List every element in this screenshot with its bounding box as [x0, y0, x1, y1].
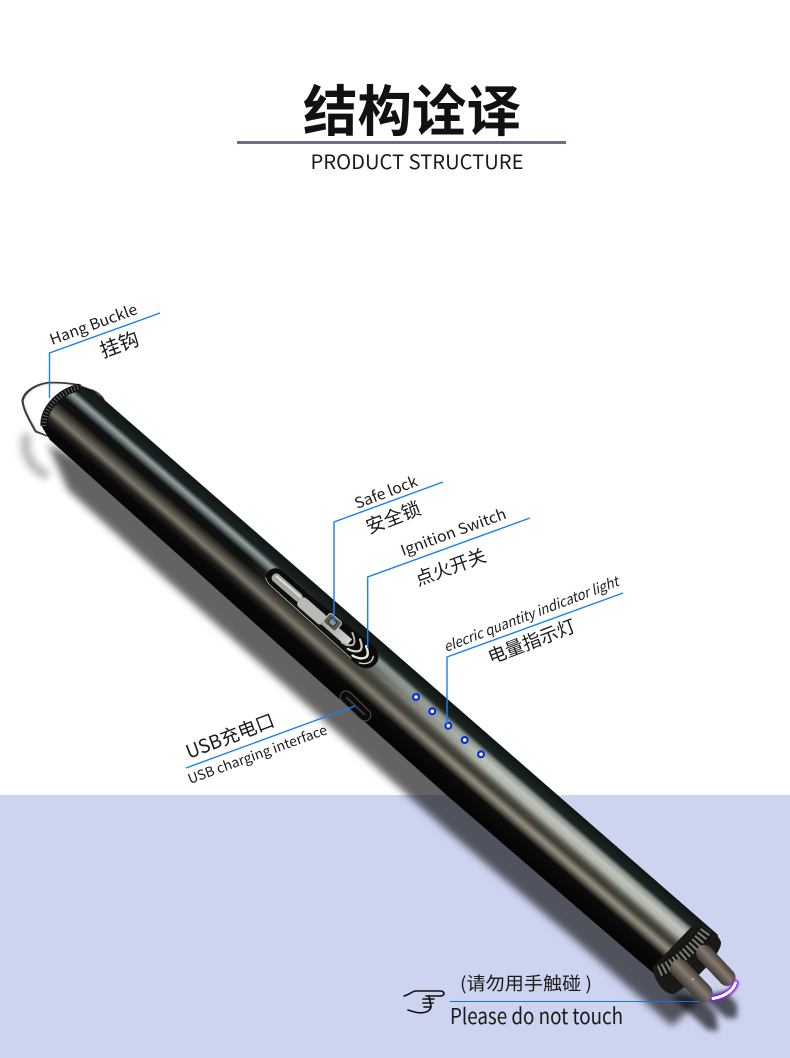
- callout: USB charging: [181, 706, 355, 788]
- electrode-side cap: [652, 922, 721, 994]
- callout: indicator light: 电量指示灯: [484, 612, 579, 670]
- callout: safe lock: 安全锁: [361, 494, 424, 540]
- electric arc: [713, 983, 736, 998]
- title: 结构诠译: [303, 67, 521, 147]
- title: [237, 67, 566, 175]
- cap face: [652, 922, 721, 994]
- slider neck: [321, 617, 352, 646]
- knurled band: [659, 929, 707, 971]
- ridged ignition tip: [339, 632, 377, 668]
- callout: indicator light: [441, 571, 623, 725]
- lighter barrel: [42, 386, 718, 988]
- callout: hang buckle: [47, 298, 160, 398]
- electrode pins: [666, 941, 739, 1006]
- callout: hang buckle: 挂钩: [95, 323, 143, 364]
- front pin: [666, 955, 717, 1006]
- slider knob: [295, 595, 329, 627]
- ignition slider assembly: [260, 562, 384, 674]
- callout: ignition switch: Ignition Switch: [398, 503, 509, 561]
- indicator lights: [412, 693, 485, 758]
- USB-C port: [338, 688, 373, 724]
- slider housing: [260, 562, 384, 674]
- callout: please do not touch: Please do not touch: [450, 999, 623, 1031]
- product: electric arc lighter: [23, 383, 739, 1031]
- lighter shadow: [48, 444, 700, 1026]
- callout: ignition switch: [368, 503, 530, 648]
- housing rim: [262, 577, 355, 659]
- title: PRODUCT STRUCTURE: [310, 146, 524, 175]
- callout: ignition switch: 点火开关: [411, 542, 490, 592]
- electrode shadows: [670, 992, 737, 1031]
- callout: USB charging: USB充电口: [181, 706, 278, 765]
- knurled end cap, hook side: [44, 387, 80, 426]
- callout: please do not touch: [404, 970, 700, 1031]
- safe lock button: [323, 613, 342, 632]
- callout: indicator light: elecric quantity indicator light: [441, 571, 623, 657]
- background: lavender blue band: [0, 795, 790, 1058]
- callout: hang buckle: Hang Buckle: [47, 298, 140, 350]
- icon: pointing hand: [404, 991, 444, 1013]
- light strip: [270, 572, 304, 603]
- callout: safe lock: Safe lock: [351, 470, 421, 514]
- callout: safe lock: [334, 470, 443, 622]
- callout: please do not touch: (请勿用手触碰 ): [460, 970, 592, 996]
- callout: USB charging: USB charging interface: [185, 719, 330, 788]
- hang buckle ring: [23, 383, 103, 435]
- hook shadow: [25, 434, 48, 476]
- rear pin: [693, 941, 739, 989]
